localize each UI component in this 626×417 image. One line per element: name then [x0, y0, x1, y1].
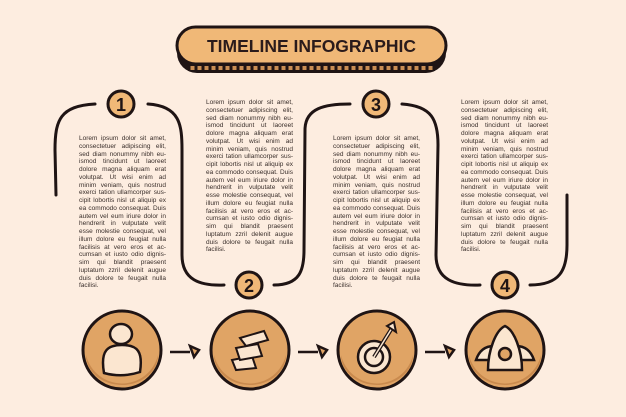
text block 4: hendrerit in vulputate velit: [461, 184, 548, 191]
text block 3: luptatum zzril delenit augue: [333, 267, 420, 274]
icon: documents: [211, 311, 289, 389]
badge 2: [236, 272, 262, 298]
text block 2: dolore magna aliquam erat: [206, 130, 293, 137]
text block 1: facilisi.: [79, 282, 99, 289]
badge 2: 2: [244, 276, 254, 296]
text block 4: cipit lobortis nisl ut aliquip ex: [461, 161, 548, 168]
text block 1: [79, 135, 166, 289]
text block 1: sim qui blandit praesent: [79, 259, 166, 266]
text block 4: cumsan et iusto odio dignis-: [461, 215, 548, 222]
text block 4: sim qui blandit praesent: [461, 223, 548, 230]
text block 4: exerci tation ullamcorper sus-: [461, 153, 548, 160]
text block 1: esse molestie consequat, vel: [79, 228, 166, 235]
badge 3: 3: [371, 95, 381, 115]
text block 1: hendrerit in vulputate velit: [79, 220, 166, 227]
text block 1: exerci tation ullamcorper sus-: [79, 189, 166, 196]
text block 2: luptatum zzril delenit augue: [206, 231, 293, 238]
text block 2: [206, 99, 293, 253]
text block 2: cipit lobortis nisl ut aliquip ex: [206, 161, 293, 168]
text block 1: facilisis at vero eros et ac-: [79, 244, 166, 250]
icon: person: [83, 311, 161, 389]
text block 1: minim veniam, quis nostrud: [79, 182, 166, 188]
text block 2: Lorem ipsum dolor sit amet,: [206, 99, 293, 106]
text block 1: sed diam nonummy nibh eu-: [79, 150, 166, 158]
text block 4: sed diam nonummy nibh eu-: [461, 114, 548, 122]
text block 1: luptatum zzril delenit augue: [79, 267, 166, 274]
text block 4: esse molestie consequat, vel: [461, 192, 548, 199]
icon: rocket: [466, 311, 544, 389]
text block 1: autem vel eum iriure dolor in: [79, 212, 166, 220]
text block 3: ea commodo consequat. Duis: [333, 205, 420, 212]
text block 3: hendrerit in vulputate velit: [333, 220, 420, 227]
text block 2: facilisis at vero eros et ac-: [206, 208, 293, 214]
text block 3: sim qui blandit praesent: [333, 259, 420, 266]
text block 3: exerci tation ullamcorper sus-: [333, 189, 420, 196]
text block 3: sed diam nonummy nibh eu-: [333, 150, 420, 158]
text block 3: Lorem ipsum dolor sit amet,: [333, 135, 420, 142]
text block 2: illum dolore eu feugiat nulla: [206, 200, 293, 207]
text block 1: consectetuer adipiscing elit,: [79, 143, 166, 150]
number badges: [108, 91, 518, 298]
text block 3: consectetuer adipiscing elit,: [333, 143, 420, 150]
text block 2: facilisi.: [206, 246, 226, 253]
text block 3: minim veniam, quis nostrud: [333, 182, 420, 188]
text block 1: dolore magna aliquam erat: [79, 166, 166, 173]
text block 3: cumsan et iusto odio dignis-: [333, 251, 420, 258]
text block 1: cumsan et iusto odio dignis-: [79, 251, 166, 258]
text block 4: facilisis at vero eros et ac-: [461, 208, 548, 214]
icon: target: [338, 311, 416, 389]
text block 3: facilisi.: [333, 282, 353, 289]
text block 4: volutpat. Ut wisi enim ad: [461, 138, 548, 145]
text block 3: facilisis at vero eros et ac-: [333, 244, 420, 250]
arrow 2: [298, 346, 327, 357]
text block 2: esse molestie consequat, vel: [206, 192, 293, 199]
text block 1: volutpat. Ut wisi enim ad: [79, 174, 166, 181]
text block 4: minim veniam, quis nostrud: [461, 146, 548, 152]
text block 2: sed diam nonummy nibh eu-: [206, 114, 293, 122]
text block 4: facilisi.: [461, 246, 481, 253]
arrow 3: [425, 346, 454, 357]
text block 3: autem vel eum iriure dolor in: [333, 212, 420, 220]
text block 4: ismod tincidunt ut laoreet: [461, 122, 548, 129]
text block 2: autem vel eum iriure dolor in: [206, 176, 293, 184]
badge 1: 1: [116, 95, 126, 115]
text block 1: ismod tincidunt ut laoreet: [79, 158, 166, 165]
text block 2: sim qui blandit praesent: [206, 223, 293, 230]
text block 3: cipit lobortis nisl ut aliquip ex: [333, 197, 420, 204]
text block 2: cumsan et iusto odio dignis-: [206, 215, 293, 222]
text block 2: consectetuer adipiscing elit,: [206, 107, 293, 114]
badge 4: 4: [500, 276, 510, 296]
text block 3: duis dolore te feugait nulla: [333, 274, 420, 282]
text block 4: illum dolore eu feugiat nulla: [461, 200, 548, 207]
title: TIMELINE INFOGRAPHIC: [207, 36, 416, 56]
text block 3: [333, 135, 420, 289]
badge 4: [492, 272, 518, 298]
text block 3: ismod tincidunt ut laoreet: [333, 158, 420, 165]
timeline path: [55, 104, 567, 285]
badge 1: [108, 91, 134, 117]
text block 2: duis dolore te feugait nulla: [206, 238, 293, 246]
text block 4: dolore magna aliquam erat: [461, 130, 548, 137]
text block 3: esse molestie consequat, vel: [333, 228, 420, 235]
text block 2: minim veniam, quis nostrud: [206, 146, 293, 152]
text block 1: Lorem ipsum dolor sit amet,: [79, 135, 166, 142]
text block 1: illum dolore eu feugiat nulla: [79, 236, 166, 243]
text block 2: hendrerit in vulputate velit: [206, 184, 293, 191]
text block 4: ea commodo consequat. Duis: [461, 169, 548, 176]
text block 1: ea commodo consequat. Duis: [79, 205, 166, 212]
title: [177, 27, 446, 73]
text block 4: autem vel eum iriure dolor in: [461, 176, 548, 184]
text block 3: volutpat. Ut wisi enim ad: [333, 174, 420, 181]
text block 4: Lorem ipsum dolor sit amet,: [461, 99, 548, 106]
arrow 1: [170, 346, 199, 357]
text block 4: consectetuer adipiscing elit,: [461, 107, 548, 114]
badge 3: [363, 91, 389, 117]
text block 2: ea commodo consequat. Duis: [206, 169, 293, 176]
text block 2: volutpat. Ut wisi enim ad: [206, 138, 293, 145]
text block 3: dolore magna aliquam erat: [333, 166, 420, 173]
text block 4: duis dolore te feugait nulla: [461, 238, 548, 246]
text block 2: ismod tincidunt ut laoreet: [206, 122, 293, 129]
text block 3: illum dolore eu feugiat nulla: [333, 236, 420, 243]
text block 4: [461, 99, 548, 253]
text block 4: luptatum zzril delenit augue: [461, 231, 548, 238]
text block 1: duis dolore te feugait nulla: [79, 274, 166, 282]
text block 2: exerci tation ullamcorper sus-: [206, 153, 293, 160]
text block 1: cipit lobortis nisl ut aliquip ex: [79, 197, 166, 204]
